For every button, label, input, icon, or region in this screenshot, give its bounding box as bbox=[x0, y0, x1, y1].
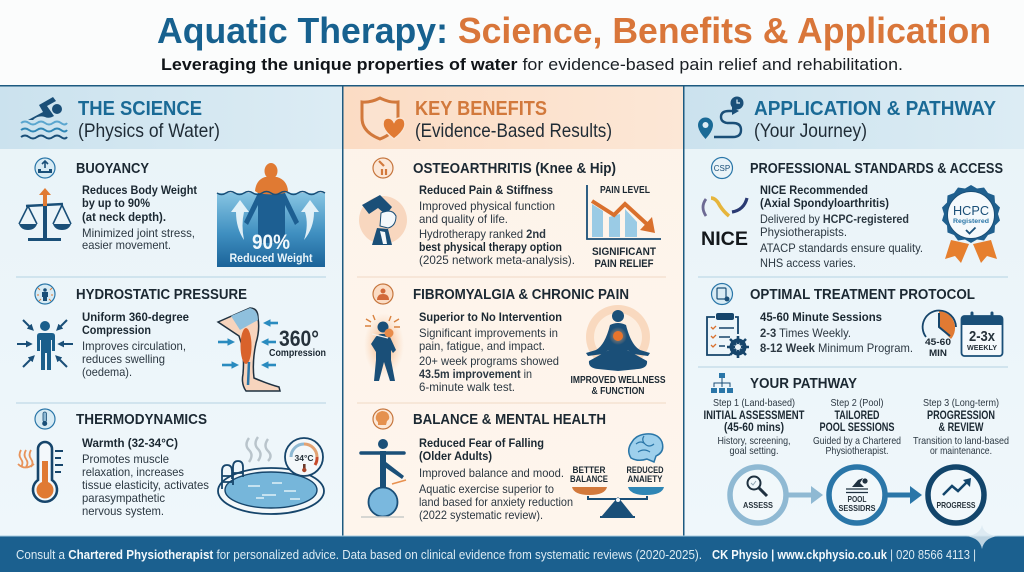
panel: the science bbox=[0, 85, 342, 536]
heading: the science: (Physics of Water) bbox=[78, 120, 220, 142]
illustration: brain and balance scale: BALANCE bbox=[570, 474, 608, 485]
logo: NICE: NICE bbox=[701, 229, 748, 250]
text: buoyancy: (at neck depth). bbox=[82, 210, 166, 224]
step circle: assess bbox=[730, 467, 786, 523]
icon: mental health badge bbox=[373, 409, 393, 429]
text: balance and mental health bbox=[419, 436, 573, 522]
icon: CSP badge: CSP bbox=[714, 164, 730, 173]
text: step 1 bbox=[704, 397, 804, 457]
text: balance and mental health: Improved balance and mood. bbox=[419, 466, 564, 480]
icon: clipboard with gear bbox=[707, 313, 749, 358]
icon: scales with up arrow bbox=[19, 188, 71, 241]
text: step 3: Step 3 (Long-term) bbox=[923, 397, 999, 409]
text: step 3: Transition to land-based bbox=[913, 435, 1009, 447]
step circle: pool sessions bbox=[829, 467, 885, 523]
illustration: brain and balance scale: REDUCED bbox=[626, 465, 664, 476]
text: buoyancy: Minimized joint stress, bbox=[82, 226, 195, 240]
text: thermodynamics: Warmth (32-34°C) bbox=[82, 436, 178, 450]
illustration: warm pool with 34C gauge: 34°C bbox=[294, 453, 314, 463]
text: professional standards: Physiotherapists. bbox=[760, 225, 847, 239]
footer disclaimer: Consult a Chartered Physiotherapist for personalized advice. Data based on clinical evidence from systematic reviews (2020-2025). bbox=[16, 548, 702, 562]
text: step 3: PROGRESSION bbox=[927, 410, 995, 422]
text: treatment protocol: 45-60 Minute Sessions bbox=[760, 310, 882, 324]
icon: shield with heart bbox=[362, 98, 405, 139]
text: step 1: goal setting. bbox=[730, 445, 778, 457]
text: step 3: & REVIEW bbox=[938, 422, 984, 434]
icon: route with clock bbox=[698, 96, 744, 139]
text: treatment protocol: 2-3 Times Weekly. bbox=[760, 326, 851, 340]
text: buoyancy: easier movement. bbox=[82, 238, 171, 252]
text: step 1: INITIAL ASSESSMENT bbox=[704, 410, 804, 422]
footer contact: CK Physio | www.ckphysio.co.uk | 020 8566 4113 | bbox=[712, 548, 976, 562]
text: hydrostatic pressure: Uniform 360-degree bbox=[82, 310, 189, 324]
heading: application and pathway: (Your Journey) bbox=[754, 120, 867, 142]
illustration: meditating figure: & FUNCTION bbox=[592, 386, 644, 397]
text: osteoarthritis: (2025 network meta-analysis). bbox=[419, 253, 575, 267]
heading: the science bbox=[78, 98, 220, 142]
footer bbox=[0, 525, 1024, 572]
text: step 2: Physiotherapist. bbox=[826, 445, 888, 457]
icon: HCPC registered badge: Registered bbox=[953, 218, 989, 225]
chart: pain level falling: SIGNIFICANT bbox=[592, 246, 656, 258]
text: buoyancy: by up to 90% bbox=[82, 196, 150, 210]
heading: application and pathway bbox=[754, 98, 997, 142]
text: step 2: TAILORED bbox=[834, 410, 880, 422]
logo: NICE bbox=[701, 198, 748, 250]
text: thermodynamics: tissue elasticity, activates bbox=[82, 478, 209, 492]
text: balance and mental health: (Older Adults) bbox=[419, 449, 492, 463]
text: professional standards: NHS access varies. bbox=[760, 256, 856, 270]
text: hydrostatic pressure: Improves circulation, bbox=[82, 339, 186, 353]
text: hydrostatic pressure: (oedema). bbox=[82, 365, 132, 379]
illustration: 90% reduced weight bbox=[217, 163, 325, 267]
icon: joint badge bbox=[373, 158, 393, 178]
text: thermodynamics: Promotes muscle bbox=[82, 452, 169, 466]
icon: thermometer bbox=[18, 442, 63, 502]
arrow: pool to progress bbox=[885, 486, 922, 504]
icon: 45-60 minute clock bbox=[923, 310, 956, 359]
icon: buoyancy badge bbox=[35, 158, 55, 178]
text: step 1: History, screening, bbox=[718, 435, 790, 447]
text: step 1: (45-60 mins) bbox=[724, 422, 784, 434]
heading: your pathway: YOUR PATHWAY bbox=[750, 376, 857, 392]
icon: CSP badge bbox=[712, 158, 732, 178]
chart: pain level falling: PAIN RELIEF bbox=[594, 258, 654, 270]
icon: HCPC registered badge bbox=[942, 185, 1000, 263]
step circle: progress: PROGRESS bbox=[936, 500, 976, 510]
text: professional standards: Delivered by HCPC-registered bbox=[760, 212, 909, 226]
text: balance and mental health: Reduced Fear of Falling bbox=[419, 436, 544, 450]
text: thermodynamics: relaxation, increases bbox=[82, 465, 184, 479]
illustration: leg with 360 compression: 360° bbox=[279, 326, 319, 351]
icon: protocol badge bbox=[712, 284, 732, 304]
text: professional standards: NICE Recommended bbox=[760, 183, 868, 197]
text: step 2 bbox=[813, 397, 901, 457]
text: fibromyalgia: 20+ week programs showed bbox=[419, 354, 559, 368]
text: balance and mental health: (2022 systematic review). bbox=[419, 508, 543, 522]
icon: swimmer bbox=[21, 97, 67, 138]
heading: buoyancy: BUOYANCY bbox=[76, 161, 149, 177]
illustration: 90% reduced weight: Reduced Weight bbox=[230, 251, 312, 265]
text: step 2: Step 2 (Pool) bbox=[830, 397, 884, 409]
panel: application and pathway bbox=[684, 85, 1024, 536]
text: thermodynamics: nervous system. bbox=[82, 504, 164, 518]
icon: 45-60 minute clock: 45-60 bbox=[925, 337, 951, 348]
heading: hydrostatic pressure: HYDROSTATIC PRESSURE bbox=[76, 287, 247, 303]
text: fibromyalgia: 6-minute walk test. bbox=[419, 380, 515, 394]
step circle: pool sessions: POOL bbox=[848, 494, 866, 504]
text: professional standards: (Axial Spondyloarthritis) bbox=[760, 196, 889, 210]
icon: pressure badge bbox=[35, 284, 55, 304]
step circle: progress bbox=[928, 467, 984, 523]
text: osteoarthritis bbox=[419, 183, 575, 267]
text: treatment protocol: 8-12 Week Minimum Program. bbox=[760, 341, 913, 355]
illustration: brain and balance scale: ANAIETY bbox=[628, 474, 663, 485]
step circle: assess: ASSESS bbox=[743, 500, 773, 510]
text: fibromyalgia: Superior to No Intervention bbox=[419, 310, 562, 324]
text: balance and mental health: land based for anxiety reduction bbox=[419, 495, 573, 509]
icon: person balancing on ball bbox=[361, 439, 406, 517]
text: osteoarthritis: and quality of life. bbox=[419, 212, 508, 226]
illustration: leg with 360 compression bbox=[218, 308, 326, 391]
icon: pathway hierarchy bbox=[711, 373, 733, 393]
icon: HCPC registered badge: HCPC bbox=[953, 203, 989, 218]
icon: 2-3x weekly calendar bbox=[962, 313, 1002, 356]
icon: 45-60 minute clock: MIN bbox=[929, 348, 947, 359]
icon: person under compression bbox=[17, 320, 73, 370]
heading: the science: THE SCIENCE bbox=[78, 98, 202, 120]
text: osteoarthritis: best physical therapy option bbox=[419, 240, 562, 254]
text: step 2: Guided by a Chartered bbox=[813, 435, 901, 447]
heading: balance and mental health: BALANCE & MENTAL HEALTH bbox=[413, 412, 606, 428]
icon: 2-3x weekly calendar: 2-3x bbox=[969, 328, 996, 345]
text: hydrostatic pressure: Compression bbox=[82, 323, 151, 337]
arrow: assess to pool bbox=[785, 486, 823, 504]
heading: key benefits bbox=[415, 98, 612, 142]
icon: person with shoulder pain bbox=[364, 313, 404, 381]
text: thermodynamics bbox=[82, 436, 209, 518]
text: hydrostatic pressure: reduces swelling bbox=[82, 352, 165, 366]
icon: thermometer badge bbox=[35, 409, 55, 429]
text: fibromyalgia: 43.5m improvement in bbox=[419, 367, 532, 381]
icon: 2-3x weekly calendar: WEEKLY bbox=[967, 343, 997, 352]
step circle: pool sessions: SESSIDRS bbox=[838, 503, 876, 513]
text: osteoarthritis: Reduced Pain & Stiffness bbox=[419, 183, 553, 197]
text: balance and mental health: Aquatic exercise superior to bbox=[419, 482, 554, 496]
heading: fibromyalgia: FIBROMYALGIA & CHRONIC PAIN bbox=[413, 287, 629, 303]
heading: key benefits: (Evidence-Based Results) bbox=[415, 120, 612, 142]
chart: pain level falling: PAIN LEVEL bbox=[600, 185, 650, 196]
heading: thermodynamics: THERMODYNAMICS bbox=[76, 412, 207, 428]
title: Aquatic Therapy: Science, Benefits & Application bbox=[157, 10, 991, 51]
text: step 1: Step 1 (Land-based) bbox=[713, 397, 795, 409]
text: fibromyalgia: pain, fatigue, and impact. bbox=[419, 339, 545, 353]
heading: optimal treatment protocol: OPTIMAL TREATMENT PROTOCOL bbox=[750, 287, 975, 303]
illustration: brain and balance scale: BETTER bbox=[572, 465, 606, 476]
text: fibromyalgia bbox=[419, 310, 562, 394]
illustration: warm pool with 34C gauge bbox=[218, 437, 324, 514]
text: step 2: POOL SESSIONS bbox=[820, 422, 895, 434]
illustration: brain and balance scale bbox=[570, 434, 664, 518]
text: buoyancy bbox=[82, 183, 197, 252]
text: professional standards bbox=[760, 183, 923, 270]
text: buoyancy: Reduces Body Weight bbox=[82, 183, 197, 197]
icon: knee joint bbox=[359, 195, 407, 245]
heading: application and pathway: APPLICATION & PATHWAY bbox=[754, 98, 997, 120]
text: osteoarthritis: Hydrotherapy ranked 2nd bbox=[419, 227, 546, 241]
text: thermodynamics: parasympathetic bbox=[82, 491, 165, 505]
text: osteoarthritis: Improved physical function bbox=[419, 199, 555, 213]
panel: key benefits bbox=[343, 85, 683, 536]
subtitle: Leveraging the unique properties of water for evidence-based pain relief and rehabilitation. bbox=[161, 56, 903, 74]
text: step 3 bbox=[913, 397, 1009, 457]
chart: pain level falling bbox=[587, 185, 661, 270]
illustration: meditating figure: IMPROVED WELLNESS bbox=[570, 375, 666, 386]
text: step 3: or maintenance. bbox=[930, 445, 992, 457]
heading: key benefits: KEY BENEFITS bbox=[415, 98, 547, 120]
text: fibromyalgia: Significant improvements in bbox=[419, 326, 558, 340]
illustration: 90% reduced weight: 90% bbox=[252, 231, 290, 254]
text: professional standards: ATACP standards ensure quality. bbox=[760, 241, 923, 255]
heading: osteoarthritis: OSTEOARTHRITIS (Knee & Hip) bbox=[413, 161, 616, 177]
illustration: leg with 360 compression: Compression bbox=[269, 348, 326, 359]
icon: chronic pain badge bbox=[373, 284, 393, 304]
text: treatment protocol bbox=[760, 310, 913, 355]
illustration: meditating figure bbox=[570, 305, 666, 397]
text: hydrostatic pressure bbox=[82, 310, 189, 379]
